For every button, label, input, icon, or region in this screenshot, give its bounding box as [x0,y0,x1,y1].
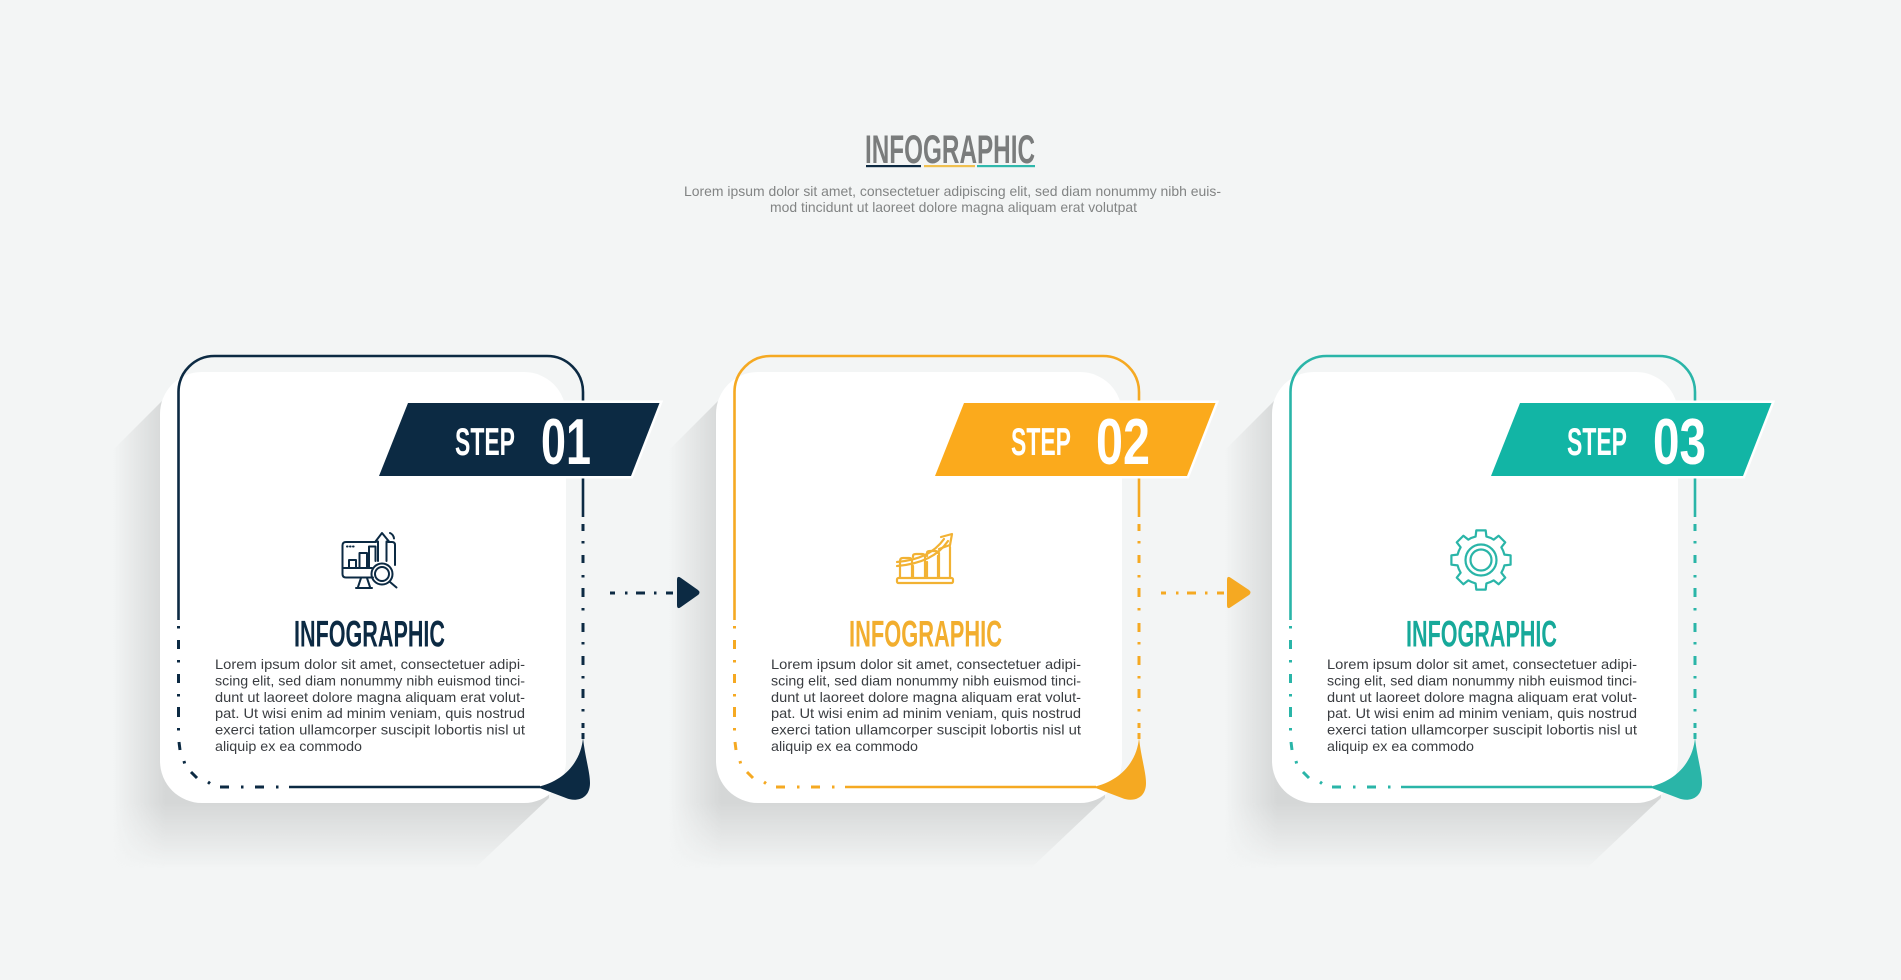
card outline [178,356,583,787]
arrow: step 1 to step 2 [610,577,700,608]
panel: step 3 [1225,356,1772,868]
corner tail [537,738,590,800]
icon: gear [1451,530,1511,590]
step body text [1327,656,1637,754]
step body text: scing elit, sed diam nonummy nibh euismod tinci- [215,672,525,688]
subtitle text [684,183,1221,215]
white card [716,372,1122,803]
step banner [379,403,660,478]
step heading: INFOGRAPHIC [1406,614,1557,654]
step body text: scing elit, sed diam nonummy nibh euismod tinci- [771,672,1081,688]
icon: rising bar chart [897,534,953,583]
step body text: aliquip ex ea commodo [1327,738,1474,754]
step heading: INFOGRAPHIC [849,614,1002,654]
step body text: exerci tation ullamcorper suscipit lobortis nisl ut [215,722,525,738]
subtitle text: mod tincidunt ut laoreet dolore magna aliquam erat volutpat [770,199,1137,215]
subtitle text: Lorem ipsum dolor sit amet, consectetuer adipiscing elit, sed diam nonummy nibh euis- [684,183,1221,199]
panel: step 1 [113,356,660,868]
title tri-colour underline [866,165,1035,167]
card shadow [113,398,549,868]
icon: monitor with chart and magnifier [342,533,396,588]
corner tail [1093,738,1146,800]
step body text: dunt ut laoreet dolore magna aliquam erat volut- [771,689,1081,705]
step body text: pat. Ut wisi enim ad minim veniam, quis nostrud [1327,705,1637,721]
arrow: step 2 to step 3 [1161,577,1250,608]
panel: step 2 [669,356,1216,868]
step number: 01 [541,405,591,478]
step body text: dunt ut laoreet dolore magna aliquam erat volut- [215,689,525,705]
card shadow [1225,398,1661,868]
step body text [771,656,1081,754]
title block [684,128,1221,215]
step label: STEP [1011,421,1071,464]
step body text: aliquip ex ea commodo [215,738,362,754]
corner tail [1649,738,1702,800]
card outline [1290,356,1695,787]
step label: STEP [1567,421,1627,464]
white card [1272,372,1678,803]
title: INFOGRAPHIC [865,128,1035,172]
card outline [734,356,1139,787]
step label: STEP [455,421,515,464]
step body text: pat. Ut wisi enim ad minim veniam, quis nostrud [771,705,1081,721]
step body text: aliquip ex ea commodo [771,738,918,754]
step body text: scing elit, sed diam nonummy nibh euismod tinci- [1327,672,1637,688]
step body text: pat. Ut wisi enim ad minim veniam, quis nostrud [215,705,525,721]
card shadow [669,398,1105,868]
step body text: exerci tation ullamcorper suscipit lobortis nisl ut [1327,722,1637,738]
step body text: dunt ut laoreet dolore magna aliquam erat volut- [1327,689,1637,705]
step heading: INFOGRAPHIC [294,614,445,654]
step body text [215,656,525,754]
step body text: Lorem ipsum dolor sit amet, consectetuer adipi- [1327,656,1637,672]
step banner [935,403,1216,478]
white card [160,372,566,803]
step banner [1491,403,1772,478]
step number: 03 [1653,405,1706,478]
step body text: Lorem ipsum dolor sit amet, consectetuer adipi- [215,656,525,672]
step body text: Lorem ipsum dolor sit amet, consectetuer adipi- [771,656,1081,672]
step number: 02 [1096,405,1150,478]
step body text: exerci tation ullamcorper suscipit lobortis nisl ut [771,722,1081,738]
